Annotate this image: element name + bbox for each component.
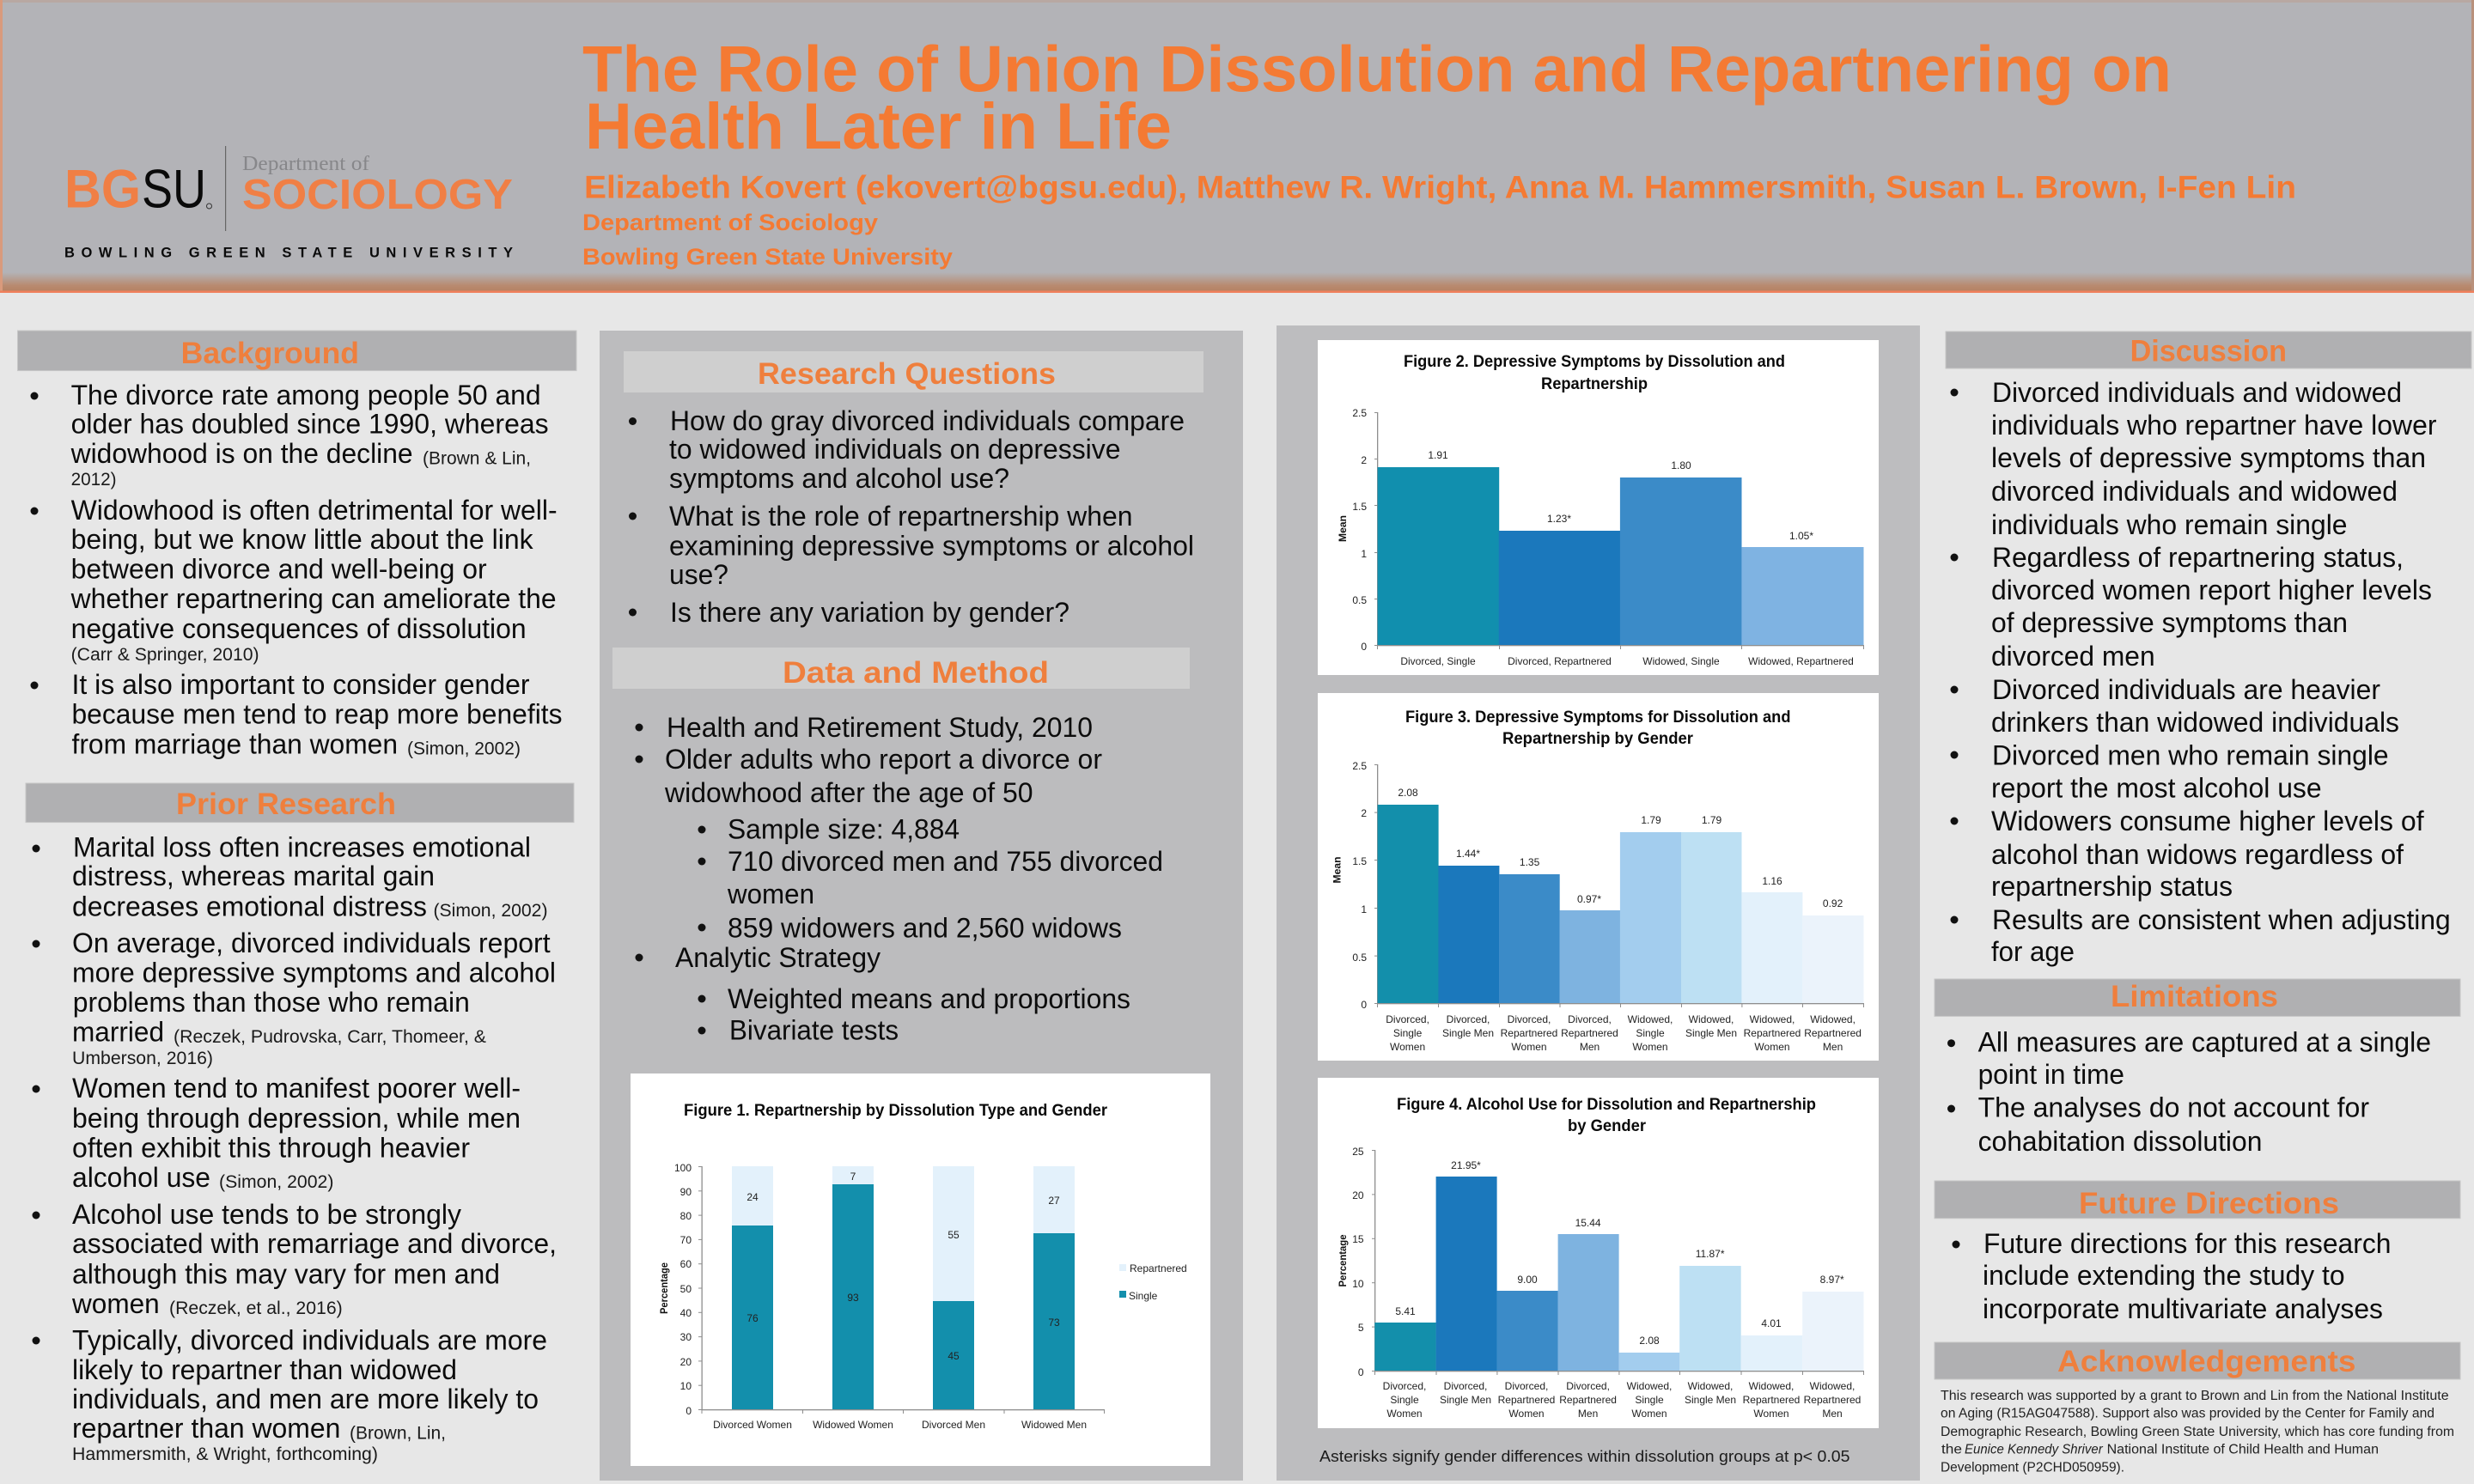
text: discussion bullets: divorced individuals and widowed xyxy=(1991,476,2398,507)
data labels: 11.87* xyxy=(1696,1248,1725,1260)
text: acknowledgements: Development (P2CHD050959). xyxy=(1941,1460,2124,1475)
category labels: Divorced, xyxy=(1568,1013,1612,1025)
text: limitations bullets xyxy=(1947,1027,2431,1157)
text: discussion bullets: divorced men xyxy=(1991,641,2155,672)
panel: limitations xyxy=(1935,979,2460,1157)
category labels xyxy=(713,1419,1087,1431)
text: prior research bullets: On average, divorced individuals report xyxy=(72,928,551,958)
text: discussion bullets: alcohol than widows regardless of xyxy=(1991,839,2404,870)
data labels: 1.16 xyxy=(1762,875,1782,887)
text: discussion bullets: repartnership status xyxy=(1991,871,2233,902)
text: discussion bullets: levels of depressive symptoms than xyxy=(1991,442,2426,473)
bars: single xyxy=(732,1184,1075,1409)
data labels xyxy=(1398,787,1843,909)
text: prior research bullets: although this may vary for men and xyxy=(72,1258,500,1289)
text: prior research bullets: Women tend to manifest poorer well- xyxy=(72,1073,521,1104)
category labels: Divorced Women xyxy=(713,1419,792,1431)
chart title: figure 4: Figure 4. Alcohol Use for Dissolution and Repartnership xyxy=(1397,1096,1816,1114)
heading: limitations xyxy=(1935,979,2460,1016)
category labels: Men xyxy=(1578,1408,1598,1420)
text: limitations bullets: All measures are captured at a single xyxy=(1978,1027,2431,1058)
category labels: Widowed, xyxy=(1628,1013,1673,1025)
panel: acknowledgements xyxy=(1935,1342,2460,1475)
chart title: figure 2 xyxy=(1404,353,1785,393)
text: discussion bullets: Divorced individuals are heavier xyxy=(1992,674,2380,705)
text: data and method bullets: Analytic Strategy xyxy=(675,942,881,973)
text: background bullets: whether repartnering can ameliorate the xyxy=(70,583,557,614)
text: background bullets: Widowhood is often detrimental for well- xyxy=(71,495,558,526)
data labels xyxy=(1428,449,1813,542)
text: background bullets: from marriage than women xyxy=(72,728,398,759)
data labels: 0.97* xyxy=(1577,893,1601,905)
data labels: 24 xyxy=(746,1191,759,1203)
category labels: Single Men xyxy=(1685,1027,1737,1039)
heading: data and method: Data and Method xyxy=(783,656,1049,690)
heading: discussion: Discussion xyxy=(2130,335,2287,368)
category labels: Widowed, xyxy=(1688,1380,1733,1392)
chart title: figure 3 xyxy=(1405,709,1790,748)
title xyxy=(582,33,2172,163)
text: prior research bullets: (Reczek, Pudrovska, Carr, Thomeer, & xyxy=(174,1027,486,1047)
text: data and method bullets: Weighted means and proportions xyxy=(728,983,1130,1014)
text: prior research bullets: being through depression, while men xyxy=(72,1103,521,1134)
y axis labels: 0 xyxy=(1358,1366,1364,1378)
text: data and method bullets: women xyxy=(727,879,814,909)
category labels: Single Men xyxy=(1442,1027,1494,1039)
text: prior research bullets: Umberson, 2016) xyxy=(72,1049,213,1068)
chart title: figure 4 xyxy=(1397,1096,1816,1135)
text: future directions bullet: incorporate multivariate analyses xyxy=(1983,1293,2383,1324)
text: prior research bullets xyxy=(33,831,557,1464)
y axis labels: 0 xyxy=(1361,999,1367,1011)
category labels: Divorced, xyxy=(1505,1380,1548,1392)
text: background bullets: being, but we know little about the link xyxy=(71,524,534,555)
y axis labels: 25 xyxy=(1352,1146,1364,1158)
category labels: Divorced, xyxy=(1447,1013,1490,1025)
data labels: 93 xyxy=(847,1292,859,1304)
category labels: Divorced Men xyxy=(922,1419,985,1431)
category labels: Women xyxy=(1754,1041,1790,1053)
category labels: Widowed Men xyxy=(1021,1419,1087,1431)
text: research questions bullets: symptoms and alcohol use? xyxy=(669,463,1009,494)
text: background bullets: It is also important to consider gender xyxy=(72,669,530,700)
y axis title: Percentage xyxy=(1338,1235,1349,1286)
text: prior research bullets: problems than those who remain xyxy=(73,987,470,1018)
text: research questions bullets: examining depressive symptoms or alcohol xyxy=(669,531,1194,562)
heading: background: Background xyxy=(181,337,359,370)
bars xyxy=(1378,805,1864,1003)
text: prior research bullets: Alcohol use tends to be strongly xyxy=(72,1199,461,1230)
y axis labels: 80 xyxy=(680,1210,692,1222)
heading: limitations: Limitations xyxy=(2111,980,2278,1013)
category labels: Women xyxy=(1508,1408,1545,1420)
y axis labels: 15 xyxy=(1352,1233,1364,1245)
heading: prior research: Prior Research xyxy=(176,788,396,821)
category labels: Single xyxy=(1393,1027,1423,1039)
text: research questions bullets: How do gray divorced individuals compare xyxy=(670,405,1185,436)
category labels: Repartnered xyxy=(1743,1394,1800,1406)
data labels: 8.97* xyxy=(1820,1274,1844,1286)
text: prior research bullets: (Simon, 2002) xyxy=(219,1172,333,1192)
data labels: 1.23* xyxy=(1547,513,1571,525)
category labels: Widowed, xyxy=(1689,1013,1734,1025)
text: acknowledgements: on Aging (R15AG047588). Support also was provided by the Center for Family and xyxy=(1941,1407,2434,1421)
legend xyxy=(1119,1262,1187,1302)
text: discussion bullets: individuals who repartner have lower xyxy=(1991,410,2437,441)
heading: data and method xyxy=(612,648,1190,690)
text: discussion bullets: divorced women report higher levels xyxy=(1991,575,2432,605)
category labels: Divorced, Single xyxy=(1400,655,1476,667)
heading: prior research xyxy=(26,783,574,823)
panel: discussion xyxy=(1946,331,2471,967)
category labels: Women xyxy=(1632,1041,1668,1053)
text: prior research bullets: often exhibit this through heavier xyxy=(72,1132,470,1163)
category labels xyxy=(1400,655,1854,667)
category labels: Repartnered xyxy=(1559,1394,1617,1406)
text: discussion bullets: for age xyxy=(1991,936,2075,967)
panel: prior research xyxy=(26,783,574,1464)
text: data and method bullets: Sample size: 4,884 xyxy=(728,814,960,845)
text: prior research bullets: likely to repartner than widowed xyxy=(72,1354,457,1385)
y axis labels: 20 xyxy=(1352,1189,1364,1201)
data labels: 45 xyxy=(948,1350,960,1362)
category labels: Men xyxy=(1823,1041,1843,1053)
heading: background xyxy=(17,331,576,371)
text: discussion bullets: Divorced men who remain single xyxy=(1992,740,2389,771)
text: background bullets xyxy=(31,380,562,759)
logo: BGSU Department of Sociology xyxy=(64,146,513,260)
data labels: 55 xyxy=(948,1229,960,1241)
text: discussion bullets: drinkers than widowed individuals xyxy=(1991,707,2399,738)
heading: research questions xyxy=(624,351,1203,392)
data labels: 2.08 xyxy=(1398,787,1418,799)
text: background bullets: 2012) xyxy=(71,470,117,490)
y axis title: Mean xyxy=(1338,515,1349,542)
category labels: Single Men xyxy=(1440,1394,1491,1406)
data labels: 1.79 xyxy=(1641,814,1661,826)
text: background bullets: The divorce rate among people 50 and xyxy=(71,380,541,411)
data labels: 0.92 xyxy=(1823,897,1843,909)
chart title: figure 2: Figure 2. Depressive Symptoms by Dissolution and xyxy=(1404,353,1785,371)
category labels: Single xyxy=(1636,1027,1665,1039)
chart title: figure 3: Figure 3. Depressive Symptoms for Dissolution and xyxy=(1405,709,1790,727)
data labels: 9.00 xyxy=(1517,1274,1538,1286)
data labels: 27 xyxy=(1048,1195,1060,1207)
chart: figure 1 stacked bars xyxy=(631,1073,1210,1466)
text: background bullets: widowhood is on the decline xyxy=(70,438,413,469)
y axis labels: 1.5 xyxy=(1352,501,1367,513)
y axis labels: 50 xyxy=(680,1283,692,1295)
category labels xyxy=(1386,1013,1862,1053)
y axis labels: 1 xyxy=(1361,548,1367,560)
text: prior research bullets: alcohol use xyxy=(72,1162,210,1193)
text: research questions bullets xyxy=(629,405,1194,628)
text: limitations bullets: The analyses do not account for xyxy=(1978,1092,2369,1123)
text: data and method bullets: Older adults who report a divorce or xyxy=(665,744,1102,775)
text: prior research bullets: individuals, and men are more likely to xyxy=(72,1384,539,1414)
title: Health Later in Life xyxy=(585,90,1172,163)
text: discussion bullets: Regardless of repartnering status, xyxy=(1992,542,2404,573)
text: prior research bullets: associated with remarriage and divorce, xyxy=(72,1228,557,1259)
data labels: 1.35 xyxy=(1520,856,1540,868)
category labels: Single Men xyxy=(1685,1394,1736,1406)
heading: acknowledgements: Acknowledgements xyxy=(2057,1345,2355,1378)
text: background bullets: (Carr & Springer, 2010) xyxy=(71,645,259,665)
category labels: Widowed, xyxy=(1810,1013,1855,1025)
category labels: Divorced, xyxy=(1444,1380,1487,1392)
y axis labels: 5 xyxy=(1358,1322,1364,1334)
y axis labels: 60 xyxy=(680,1258,692,1270)
y axis labels: 100 xyxy=(674,1162,692,1174)
text: acknowledgements: This research was supported by a grant to Brown and Lin from the National Institute xyxy=(1941,1389,2449,1403)
heading: future directions: Future Directions xyxy=(2079,1187,2339,1220)
bars xyxy=(1378,467,1864,645)
category labels: Repartnered xyxy=(1498,1394,1555,1406)
y axis labels xyxy=(1352,1146,1364,1378)
text: discussion bullets: Divorced individuals and widowed xyxy=(1992,377,2402,408)
category labels: Widowed, Repartnered xyxy=(1748,655,1854,667)
text: data and method bullets xyxy=(636,712,1163,1046)
category labels: Widowed, xyxy=(1810,1380,1855,1392)
category labels: Repartnered xyxy=(1561,1027,1618,1039)
affiliation xyxy=(582,210,953,270)
text: prior research bullets: repartner than women xyxy=(72,1413,340,1444)
y axis title: Mean xyxy=(1333,857,1344,883)
text: discussion bullets xyxy=(1950,377,2451,967)
text: acknowledgements: the xyxy=(1941,1443,1962,1457)
authors: Elizabeth Kovert (ekovert@bgsu.edu), Matthew R. Wright, Anna M. Hammersmith, Susan L. Brown, I-Fen Lin xyxy=(584,170,2296,205)
logo: BGSU Department of Sociology: BG xyxy=(64,160,141,220)
y axis labels: 30 xyxy=(680,1331,692,1343)
category labels: Widowed Women xyxy=(813,1419,893,1431)
heading: discussion xyxy=(1946,331,2471,368)
heading: future directions xyxy=(1935,1181,2460,1220)
data labels xyxy=(1395,1159,1844,1347)
y axis labels: 0 xyxy=(1361,641,1367,653)
text: research questions bullets: Is there any variation by gender? xyxy=(670,597,1069,628)
y axis labels: 1 xyxy=(1361,903,1367,915)
y axis labels: 0.5 xyxy=(1352,594,1367,606)
text: prior research bullets: married xyxy=(72,1017,164,1048)
y axis title: Percentage xyxy=(660,1262,670,1314)
panel: middle column xyxy=(600,331,1243,1481)
note: asterisks: Asterisks signify gender differences within dissolution groups at p< 0.05 xyxy=(1319,1447,1850,1465)
text: prior research bullets: (Simon, 2002) xyxy=(433,901,548,921)
y axis labels: 2.5 xyxy=(1352,760,1367,772)
text: background bullets: older has doubled since 1990, whereas xyxy=(71,408,549,439)
category labels: Repartnered xyxy=(1804,1027,1862,1039)
y axis labels: 10 xyxy=(1352,1278,1364,1290)
category labels: Divorced, xyxy=(1383,1380,1426,1392)
data labels: 1.79 xyxy=(1702,814,1722,826)
panel: figures column xyxy=(1277,325,1920,1481)
text: future directions bullet: Future directions for this research xyxy=(1983,1228,2392,1259)
text: future directions bullet: include extending the study to xyxy=(1983,1260,2345,1291)
text: future directions bullet xyxy=(1952,1228,2392,1324)
y axis labels: 0 xyxy=(686,1405,692,1417)
text: prior research bullets: Hammersmith, & Wright, forthcoming) xyxy=(72,1444,378,1464)
affiliation: Department of Sociology xyxy=(582,210,878,235)
data labels: 73 xyxy=(1048,1317,1060,1329)
data labels: 1.05* xyxy=(1789,530,1813,542)
data labels: 15.44 xyxy=(1575,1217,1601,1229)
text: prior research bullets: Typically, divorced individuals are more xyxy=(72,1324,547,1355)
text: prior research bullets: Marital loss often increases emotional xyxy=(73,831,531,862)
y axis labels: 2 xyxy=(1361,454,1367,466)
text: discussion bullets: of depressive symptoms than xyxy=(1991,607,2348,638)
text: prior research bullets: distress, whereas marital gain xyxy=(72,861,435,891)
y axis labels: 1.5 xyxy=(1352,855,1367,867)
category labels: Widowed, xyxy=(1627,1380,1672,1392)
category labels: Women xyxy=(1753,1408,1789,1420)
chart: figure 3 xyxy=(1318,693,1879,1061)
data labels: 5.41 xyxy=(1395,1305,1416,1317)
category labels: Repartnered xyxy=(1501,1027,1557,1039)
text: background bullets: because men tend to reap more benefits xyxy=(72,699,562,730)
text: research questions bullets: to widowed individuals on depressive xyxy=(669,434,1120,465)
text: data and method bullets: Bivariate tests xyxy=(729,1015,899,1046)
chart title: figure 1: Figure 1. Repartnership by Dissolution Type and Gender xyxy=(684,1102,1108,1120)
text: acknowledgements: National Institute of Child Health and Human xyxy=(2107,1443,2379,1457)
title: The Role of Union Dissolution and Repartnering on xyxy=(582,33,2172,106)
text: prior research bullets: decreases emotional distress xyxy=(72,891,427,921)
text: limitations bullets: point in time xyxy=(1978,1059,2124,1090)
chart title: figure 2: Repartnership xyxy=(1541,375,1648,393)
category labels: Single xyxy=(1390,1394,1419,1406)
y axis labels: 2.5 xyxy=(1352,407,1367,419)
text: discussion bullets: report the most alcohol use xyxy=(1991,773,2322,804)
panel: future directions xyxy=(1935,1181,2460,1324)
bars: repartnered xyxy=(732,1166,1075,1302)
category labels: Men xyxy=(1822,1408,1843,1420)
text: prior research bullets: (Reczek, et al., 2016) xyxy=(169,1298,343,1318)
category labels: Repartnered xyxy=(1804,1394,1861,1406)
panel: background xyxy=(17,331,576,759)
text: acknowledgements: Demographic Research, Bowling Green State University, which has core funding from xyxy=(1941,1425,2454,1439)
data labels: 1.91 xyxy=(1428,449,1448,461)
text: data and method bullets: 859 widowers and 2,560 widows xyxy=(728,913,1122,944)
text: background bullets: (Brown & Lin, xyxy=(423,448,531,468)
data labels: 4.01 xyxy=(1761,1317,1782,1329)
text: prior research bullets: women xyxy=(71,1288,160,1319)
category labels: Men xyxy=(1580,1041,1600,1053)
data labels: 21.95* xyxy=(1451,1159,1481,1171)
logo: BGSU Department of Sociology: Department of xyxy=(242,153,369,175)
category labels: Women xyxy=(1631,1408,1667,1420)
text: prior research bullets: more depressive symptoms and alcohol xyxy=(72,957,556,988)
heading: acknowledgements xyxy=(1935,1342,2460,1379)
logo: BGSU Department of Sociology: BOWLING GREEN STATE UNIVERSITY xyxy=(64,245,513,260)
category labels: Widowed, xyxy=(1750,1013,1795,1025)
text: discussion bullets: Results are consistent when adjusting xyxy=(1992,904,2451,935)
text: research questions bullets: What is the role of repartnership when xyxy=(669,501,1132,532)
logo: BGSU Department of Sociology: SOCIOLOGY xyxy=(242,172,513,218)
text: research questions bullets: use? xyxy=(669,559,728,590)
text: background bullets: (Simon, 2002) xyxy=(407,739,521,759)
y axis labels: 10 xyxy=(680,1380,692,1392)
category labels: Divorced, xyxy=(1508,1013,1551,1025)
logo: BGSU Department of Sociology: SU xyxy=(142,160,206,220)
y axis labels xyxy=(1352,760,1367,1011)
data labels: 76 xyxy=(746,1312,759,1324)
data labels xyxy=(746,1171,1060,1362)
y axis labels: 40 xyxy=(680,1307,692,1319)
text: prior research bullets: (Brown, Lin, xyxy=(350,1424,446,1444)
text: acknowledgements: Eunice Kennedy Shriver xyxy=(1965,1443,2104,1457)
data labels: 1.80 xyxy=(1671,459,1691,471)
y axis labels: 2 xyxy=(1361,807,1367,819)
y axis labels: 70 xyxy=(680,1234,692,1246)
text: discussion bullets: individuals who remain single xyxy=(1991,509,2347,540)
category labels: Repartnered xyxy=(1744,1027,1801,1039)
legend: Single xyxy=(1129,1290,1158,1302)
data labels: 2.08 xyxy=(1639,1335,1660,1347)
text: discussion bullets: Widowers consume higher levels of xyxy=(1991,806,2424,836)
chart: figure 4 xyxy=(1318,1078,1879,1428)
affiliation: Bowling Green State University xyxy=(582,244,953,270)
y axis labels: 0.5 xyxy=(1352,952,1367,964)
y axis labels xyxy=(1352,407,1367,653)
text: background bullets: negative consequences of dissolution xyxy=(71,613,527,644)
header banner xyxy=(0,0,2474,293)
text: data and method bullets: 710 divorced men and 755 divorced xyxy=(728,846,1163,877)
y axis labels: 20 xyxy=(680,1356,692,1368)
category labels: Women xyxy=(1511,1041,1547,1053)
category labels: Widowed, xyxy=(1749,1380,1794,1392)
category labels: Women xyxy=(1386,1408,1423,1420)
category labels: Women xyxy=(1390,1041,1425,1053)
text: data and method bullets: Health and Retirement Study, 2010 xyxy=(667,712,1093,743)
category labels: Divorced, xyxy=(1386,1013,1429,1025)
chart title: figure 3: Repartnership by Gender xyxy=(1502,730,1694,748)
text: limitations bullets: cohabitation dissolution xyxy=(1978,1126,2262,1157)
data labels: 7 xyxy=(850,1171,856,1183)
category labels: Divorced, xyxy=(1566,1380,1610,1392)
category labels: Single xyxy=(1635,1394,1664,1406)
heading: research questions: Research Questions xyxy=(758,357,1056,391)
category labels: Divorced, Repartnered xyxy=(1508,655,1612,667)
bars xyxy=(1374,1177,1864,1371)
text: background bullets: between divorce and well-being or xyxy=(71,554,487,585)
legend: Repartnered xyxy=(1130,1262,1187,1274)
y axis labels: 90 xyxy=(680,1186,692,1198)
category labels xyxy=(1383,1380,1861,1420)
data labels: 1.44* xyxy=(1456,848,1480,860)
y axis labels xyxy=(674,1162,692,1417)
chart: figure 2 xyxy=(1318,340,1879,675)
text: acknowledgements xyxy=(1941,1389,2454,1475)
chart title: figure 4: by Gender xyxy=(1568,1117,1647,1135)
category labels: Widowed, Single xyxy=(1642,655,1720,667)
text: data and method bullets: widowhood after the age of 50 xyxy=(664,777,1033,808)
